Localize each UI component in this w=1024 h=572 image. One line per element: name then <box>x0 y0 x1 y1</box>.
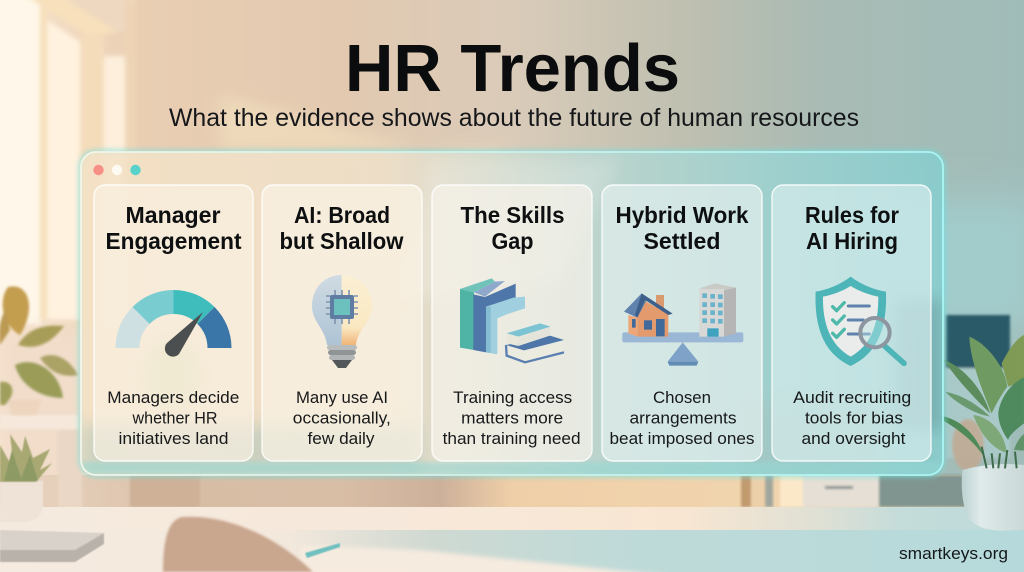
description: arrangements <box>630 410 736 428</box>
source credit: smartkeys.org <box>899 544 1008 563</box>
description: occasionally, <box>293 410 391 428</box>
description: initiatives land <box>118 430 228 448</box>
right potted plant <box>933 335 1024 531</box>
description: Chosen <box>653 389 711 407</box>
description: matters more <box>461 410 563 428</box>
heading <box>280 202 404 254</box>
description <box>793 389 911 448</box>
window control dots <box>93 165 141 175</box>
description <box>443 389 581 448</box>
heading: The Skills <box>460 202 564 228</box>
chair back <box>163 517 313 572</box>
icon: stack of books <box>460 278 564 362</box>
description: Many use AI <box>296 389 388 407</box>
card: Manager Engagement <box>94 185 253 461</box>
subtitle: What the evidence shows about the future of human resources <box>169 104 859 132</box>
description: few daily <box>308 430 375 448</box>
description: Training access <box>453 389 572 407</box>
glass panel <box>81 152 943 475</box>
icon: shield with checklist and magnifier <box>816 277 904 366</box>
description <box>107 389 239 448</box>
heading: Gap <box>492 228 534 254</box>
heading <box>616 202 749 254</box>
description: beat imposed ones <box>610 430 754 448</box>
card: Hybrid Work Settled <box>602 185 762 461</box>
description: and oversight <box>802 430 906 448</box>
left potted plant <box>0 286 78 415</box>
heading: but Shallow <box>280 228 404 254</box>
pen on desk <box>305 543 340 558</box>
icon: gauge <box>116 290 232 357</box>
description: whether HR <box>132 410 218 428</box>
description: Managers decide <box>107 389 239 407</box>
succulent in pot <box>0 434 52 522</box>
icon: light bulb with chip <box>312 275 372 368</box>
description: Audit recruiting <box>793 389 911 407</box>
heading: Manager <box>126 202 221 228</box>
heading <box>805 202 899 254</box>
heading: Hybrid Work <box>616 202 749 228</box>
heading <box>460 202 564 254</box>
card: Rules for AI Hiring <box>772 185 931 461</box>
card: The Skills Gap <box>432 185 592 461</box>
heading: Engagement <box>106 228 242 254</box>
description: tools for bias <box>805 410 903 428</box>
desk <box>0 507 1024 572</box>
title: HR Trends <box>345 31 680 106</box>
heading: Rules for <box>805 202 899 228</box>
heading <box>106 202 242 254</box>
heading: Settled <box>644 228 720 254</box>
icon: house and office on a balance <box>622 283 743 366</box>
heading: AI Hiring <box>806 228 898 254</box>
notebook on desk <box>0 530 104 562</box>
card: AI Broad but Shallow <box>262 185 422 461</box>
heading: AI: Broad <box>294 202 390 228</box>
description: than training need <box>443 430 581 448</box>
description <box>610 389 754 448</box>
description <box>293 389 391 448</box>
